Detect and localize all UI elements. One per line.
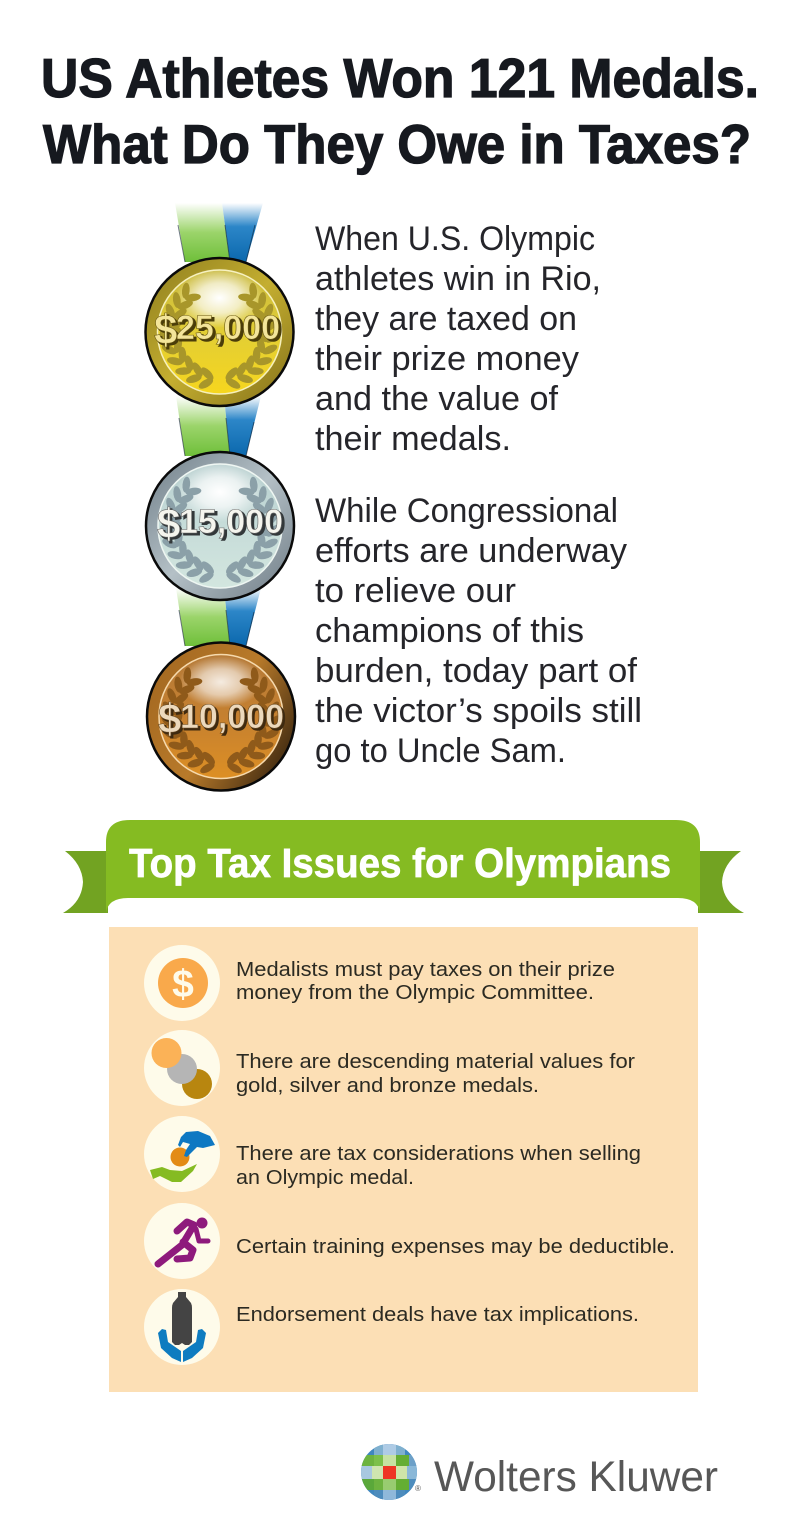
- ribbon: middle: [176, 396, 261, 456]
- bronze medal: 10,000: [182, 700, 286, 738]
- logo globe: [361, 1444, 417, 1500]
- logo: Wolters Kluwer: [361, 1444, 718, 1501]
- issue 2: [144, 1030, 635, 1106]
- issue text 5: Endorsement deals have tax implications.: [236, 1304, 639, 1326]
- intro text: paragraph two: the victor’s spoils still: [315, 692, 642, 730]
- bronze medal: 10,000: [180, 698, 284, 736]
- intro text: paragraph two: burden, today part of: [315, 652, 638, 690]
- gold medal: 25,000: [178, 311, 282, 349]
- intro text: paragraph one: their prize money: [315, 340, 579, 378]
- panel: tax issues: [109, 927, 698, 1392]
- gold medal: $: [156, 308, 179, 355]
- intro text: paragraph one: they are taxed on: [315, 300, 577, 338]
- title: US Athletes Won 121 Medals.: [41, 47, 759, 109]
- issue text 1: [236, 959, 615, 1004]
- issue text 2: There are descending material values for: [236, 1051, 635, 1073]
- medal column: [146, 203, 295, 790]
- intro text: paragraph one: When U.S. Olympic: [315, 220, 595, 258]
- issue text 2: gold, silver and bronze medals.: [236, 1075, 539, 1097]
- silver medal: [146, 452, 294, 600]
- gold medal: [146, 258, 294, 406]
- intro text: paragraph two: go to Uncle Sam.: [315, 732, 566, 770]
- icon: runner: [144, 1203, 220, 1279]
- issue text 1: Medalists must pay taxes on their prize: [236, 959, 615, 981]
- intro text: paragraph one: [315, 220, 601, 458]
- banner heading: [63, 820, 744, 913]
- silver medal: 15,000: [182, 505, 286, 543]
- issue text 3: [236, 1143, 641, 1189]
- intro text: paragraph two: to relieve our: [315, 572, 516, 610]
- title: [41, 47, 759, 175]
- intro text: paragraph one: their medals.: [315, 420, 511, 458]
- issue text 1: money from the Olympic Committee.: [236, 982, 594, 1004]
- issue 4: [144, 1203, 675, 1279]
- ribbon tail: left: [63, 851, 108, 913]
- bronze medal: $: [158, 695, 181, 742]
- ribbon: top: [175, 203, 263, 262]
- issue 5: [144, 1289, 639, 1365]
- silver medal: $: [157, 500, 180, 547]
- intro text: paragraph one: athletes win in Rio,: [315, 260, 601, 298]
- title: What Do They Owe in Taxes?: [43, 113, 751, 175]
- icon: three medals: [144, 1030, 220, 1106]
- logo wordmark: Wolters Kluwer: [434, 1453, 718, 1501]
- icon: selling a medal: [144, 1116, 220, 1192]
- ribbon: lower: [176, 588, 261, 646]
- intro text: paragraph two: efforts are underway: [315, 532, 627, 570]
- ribbon tail: right: [698, 851, 744, 913]
- issue text 3: There are tax considerations when selling: [236, 1143, 641, 1165]
- bronze medal: [147, 642, 295, 790]
- issue 1: [144, 945, 615, 1021]
- intro text: paragraph two: While Congressional: [315, 492, 618, 530]
- intro text: paragraph two: [315, 492, 642, 770]
- bronze medal: $: [160, 697, 183, 744]
- silver medal: $: [159, 502, 182, 549]
- intro text: paragraph one: and the value of: [315, 380, 559, 418]
- icon: dollar coin: [144, 945, 220, 1021]
- icon: dollar coin: $: [172, 963, 194, 1006]
- icon: bottle in hands: [144, 1289, 220, 1365]
- logo registered mark: ®: [415, 1484, 421, 1493]
- issue 3: [144, 1116, 641, 1192]
- gold medal: 25,000: [176, 309, 280, 347]
- banner band: [106, 820, 700, 913]
- issue text 3: an Olympic medal.: [236, 1167, 414, 1189]
- panel background: [109, 927, 698, 1392]
- gold medal: $: [154, 306, 177, 353]
- silver medal: 15,000: [179, 503, 283, 541]
- issue text 4: Certain training expenses may be deductible.: [236, 1236, 675, 1258]
- banner title: Top Tax Issues for Olympians: [129, 840, 671, 886]
- issue text 2: [236, 1051, 635, 1097]
- intro text: paragraph two: champions of this: [315, 612, 584, 650]
